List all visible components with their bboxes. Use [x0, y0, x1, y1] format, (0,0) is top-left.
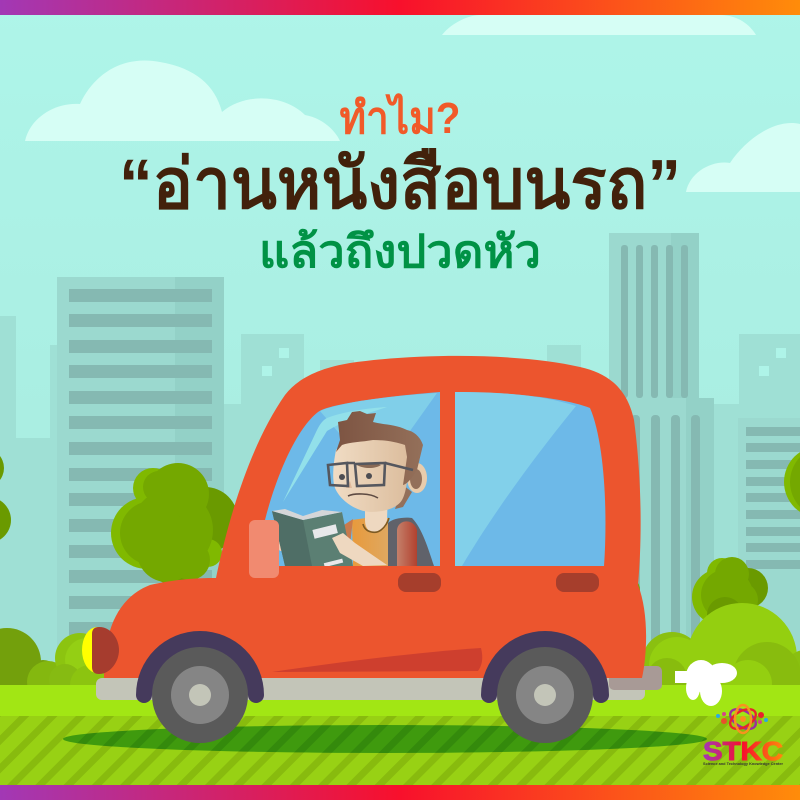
city skyline [0, 233, 800, 688]
brow shadow [357, 464, 381, 468]
rear window highlight [455, 392, 576, 566]
windshield highlight [283, 407, 387, 502]
door handle rear [556, 573, 599, 592]
title line 2: “อ่านหนังสือบนรถ” [119, 145, 681, 223]
car [82, 356, 662, 743]
hair back [395, 485, 412, 509]
far hand [279, 541, 282, 551]
neck [365, 510, 388, 532]
bush: behind car left [111, 463, 238, 585]
glasses [328, 463, 413, 486]
backpack [387, 518, 434, 566]
bumper [96, 678, 645, 700]
logo atom icon [716, 705, 768, 733]
book [272, 509, 353, 567]
rear window [455, 392, 605, 566]
far buildings [0, 316, 800, 688]
car body [104, 356, 646, 678]
eyes [339, 473, 372, 480]
ground [0, 685, 800, 785]
logo: STKC [703, 705, 783, 766]
bush: far left [0, 628, 110, 705]
driver [272, 411, 434, 567]
bush: dark right [692, 557, 768, 633]
right office block [738, 418, 800, 678]
front wheel [136, 631, 264, 743]
bottom gradient bar [0, 785, 800, 800]
rear wheel [481, 631, 609, 743]
door handle front [398, 573, 441, 592]
seat headrest [249, 520, 279, 578]
windshield window [262, 392, 440, 566]
headlight [82, 627, 119, 674]
top gradient bar [0, 0, 800, 15]
exhaust [609, 666, 662, 690]
car shadow [63, 725, 707, 753]
face [333, 433, 408, 512]
exhaust smoke [675, 660, 737, 706]
title block [119, 92, 681, 277]
collar [363, 518, 389, 532]
shirt [352, 518, 388, 566]
title line 3: แล้วถึงปวดหัว [259, 226, 541, 277]
windshield upper tint [320, 393, 437, 452]
bush: light right [642, 603, 800, 713]
nose [346, 481, 352, 488]
strap [397, 521, 417, 566]
logo tagline: Science and Technology Knowledge Center [703, 761, 783, 766]
left office tower [57, 277, 224, 677]
mouth [348, 494, 378, 498]
bushes [0, 446, 800, 713]
hand [332, 533, 387, 566]
ear [407, 463, 427, 493]
right tall tower [605, 233, 714, 678]
title line 1: ทำไม? [340, 92, 460, 143]
hair [336, 411, 423, 485]
bush: right edge [784, 446, 800, 518]
logo wordmark: STKC [703, 736, 783, 766]
clouds [25, 15, 800, 192]
bush: left edge [0, 448, 11, 543]
sill shadow [272, 648, 482, 672]
bush: small behind car right [612, 576, 640, 604]
